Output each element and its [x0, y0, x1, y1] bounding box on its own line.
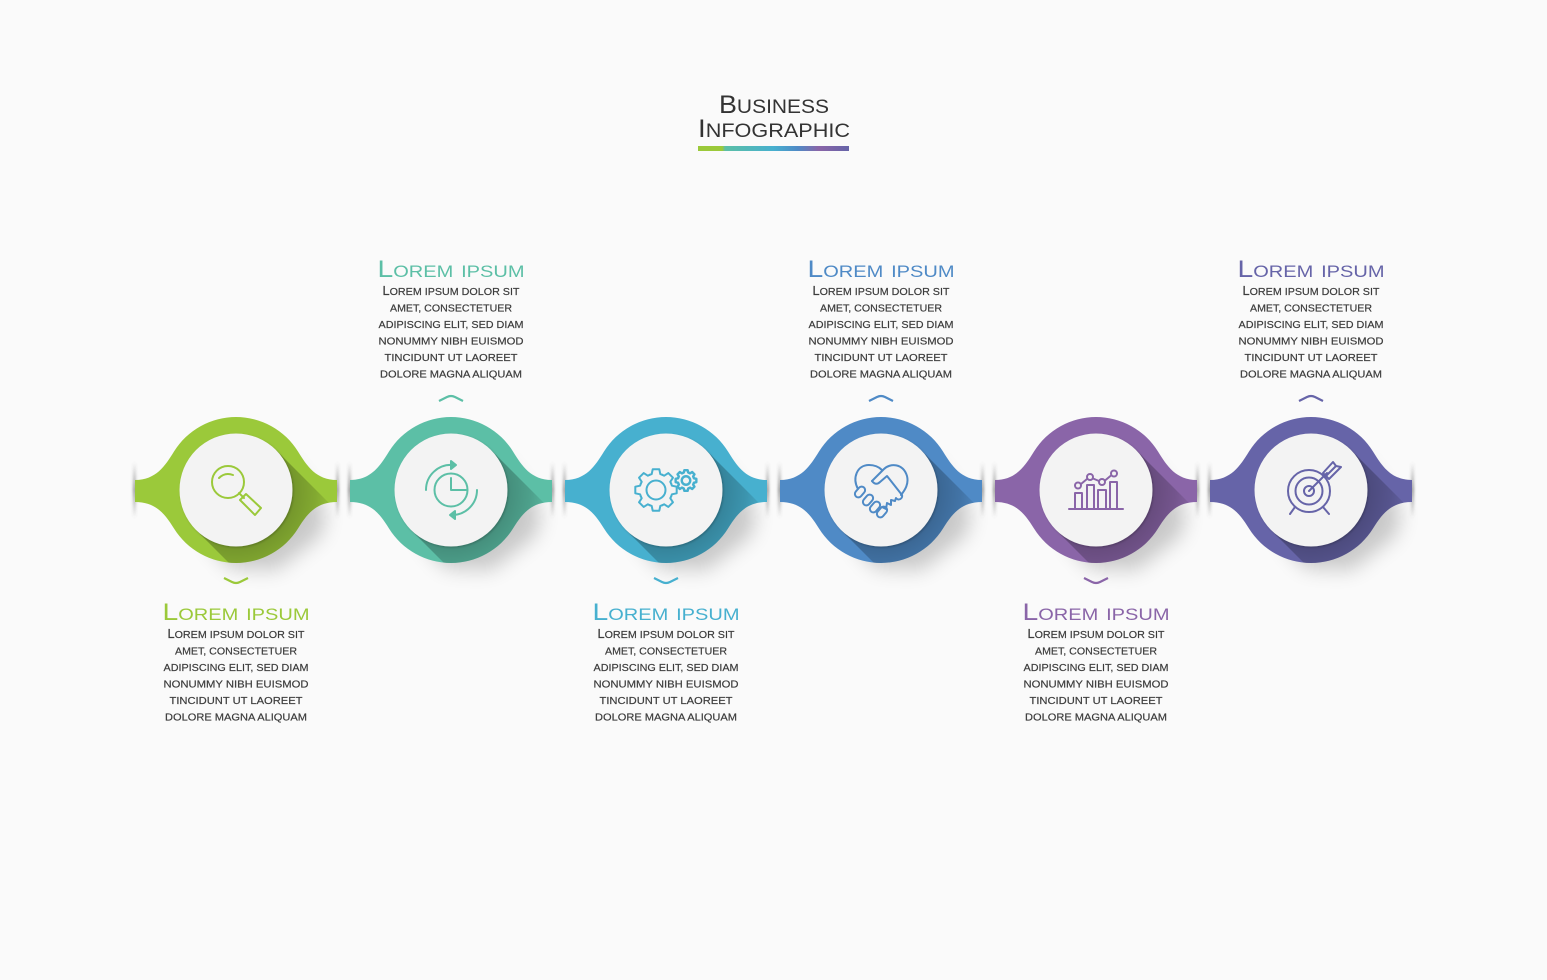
step 3 text: DOLORE MAGNA ALIQUAM [595, 712, 737, 724]
step 1 text: AMET, CONSECTETUER [175, 646, 297, 658]
title [698, 91, 850, 143]
step 5 text [1022, 599, 1170, 724]
step 3 node: gears [563, 417, 776, 600]
step 2 chevron [439, 396, 463, 401]
step 6 node: target [1208, 417, 1421, 600]
ring shape [565, 417, 767, 563]
step 4 chevron [869, 396, 893, 401]
step 3 text: ADIPISCING ELIT, SED DIAM [594, 662, 738, 674]
step 5 text: NONUMMY NIBH EUISMOD [1024, 678, 1169, 690]
ring shape [995, 417, 1197, 563]
step 3 text: Lorem ipsum [592, 599, 740, 626]
ring shape [135, 417, 337, 563]
icon: target with arrow [1288, 462, 1341, 514]
step 4 text: NONUMMY NIBH EUISMOD [808, 336, 954, 348]
step 6 text: AMET, CONSECTETUER [1250, 302, 1372, 314]
step 3 text: AMET, CONSECTETUER [605, 646, 727, 658]
step 6 text: NONUMMY NIBH EUISMOD [1238, 336, 1384, 348]
step 1 text: LOREM IPSUM DOLOR SIT [168, 627, 305, 641]
step 1 node: search [133, 417, 346, 600]
icon: clock with cycle arrows [426, 461, 477, 519]
step 4 text: Lorem ipsum [808, 256, 954, 283]
step 4 text: LOREM IPSUM DOLOR SIT [812, 284, 950, 298]
step 4 text: DOLORE MAGNA ALIQUAM [810, 368, 952, 380]
step 6 text [1238, 256, 1384, 380]
step 1 text [162, 599, 310, 724]
step 1 text: NONUMMY NIBH EUISMOD [164, 678, 309, 690]
icon: gears [635, 469, 696, 511]
ring shape [1210, 417, 1412, 563]
step 2 text: DOLORE MAGNA ALIQUAM [380, 368, 522, 380]
title colour rule [698, 146, 849, 151]
step 5 text: Lorem ipsum [1022, 599, 1170, 626]
step 2 text [378, 256, 524, 380]
step 6 text: LOREM IPSUM DOLOR SIT [1242, 284, 1380, 298]
step 5 text: TINCIDUNT UT LAOREET [1030, 695, 1163, 707]
icon: handshake heart [853, 465, 908, 519]
step 2 text: NONUMMY NIBH EUISMOD [378, 336, 524, 348]
step 1 text: TINCIDUNT UT LAOREET [170, 695, 303, 707]
step 3 text: TINCIDUNT UT LAOREET [600, 695, 733, 707]
step 2 text: AMET, CONSECTETUER [390, 302, 512, 314]
icon: bar and line chart [1069, 470, 1123, 509]
step 3 text: LOREM IPSUM DOLOR SIT [598, 627, 735, 641]
step 5 node: chart [993, 417, 1206, 600]
ring shape [780, 417, 982, 563]
step 4 text: ADIPISCING ELIT, SED DIAM [808, 319, 954, 331]
step 6 text: ADIPISCING ELIT, SED DIAM [1238, 319, 1384, 331]
ring shape [350, 417, 552, 563]
step 4 text: AMET, CONSECTETUER [820, 302, 942, 314]
step 2 text: LOREM IPSUM DOLOR SIT [382, 284, 520, 298]
step 2 text: Lorem ipsum [378, 256, 524, 283]
step 4 text [808, 256, 954, 380]
step 1 text: Lorem ipsum [162, 599, 310, 626]
step 2 node: time [348, 417, 561, 600]
step 3 chevron [654, 578, 678, 583]
title: INFOGRAPHIC [698, 115, 850, 143]
step 5 text: ADIPISCING ELIT, SED DIAM [1024, 662, 1168, 674]
icon: magnifier [212, 466, 261, 515]
step 5 text: DOLORE MAGNA ALIQUAM [1025, 712, 1167, 724]
step 5 text: LOREM IPSUM DOLOR SIT [1028, 627, 1165, 641]
step 1 text: DOLORE MAGNA ALIQUAM [165, 712, 307, 724]
title: BUSINESS [719, 91, 829, 119]
step 3 text [592, 599, 740, 724]
step 6 text: Lorem ipsum [1238, 256, 1384, 283]
step 2 text: ADIPISCING ELIT, SED DIAM [378, 319, 524, 331]
step 5 text: AMET, CONSECTETUER [1035, 646, 1157, 658]
step 3 text: NONUMMY NIBH EUISMOD [594, 678, 739, 690]
step 5 chevron [1084, 578, 1108, 583]
step 4 text: TINCIDUNT UT LAOREET [814, 352, 948, 364]
step 2 text: TINCIDUNT UT LAOREET [384, 352, 518, 364]
step 1 chevron [224, 578, 248, 583]
step 6 text: TINCIDUNT UT LAOREET [1244, 352, 1378, 364]
step 1 text: ADIPISCING ELIT, SED DIAM [164, 662, 308, 674]
step 6 text: DOLORE MAGNA ALIQUAM [1240, 368, 1382, 380]
step 6 chevron [1299, 396, 1323, 401]
step 4 node: handshake [778, 417, 991, 600]
